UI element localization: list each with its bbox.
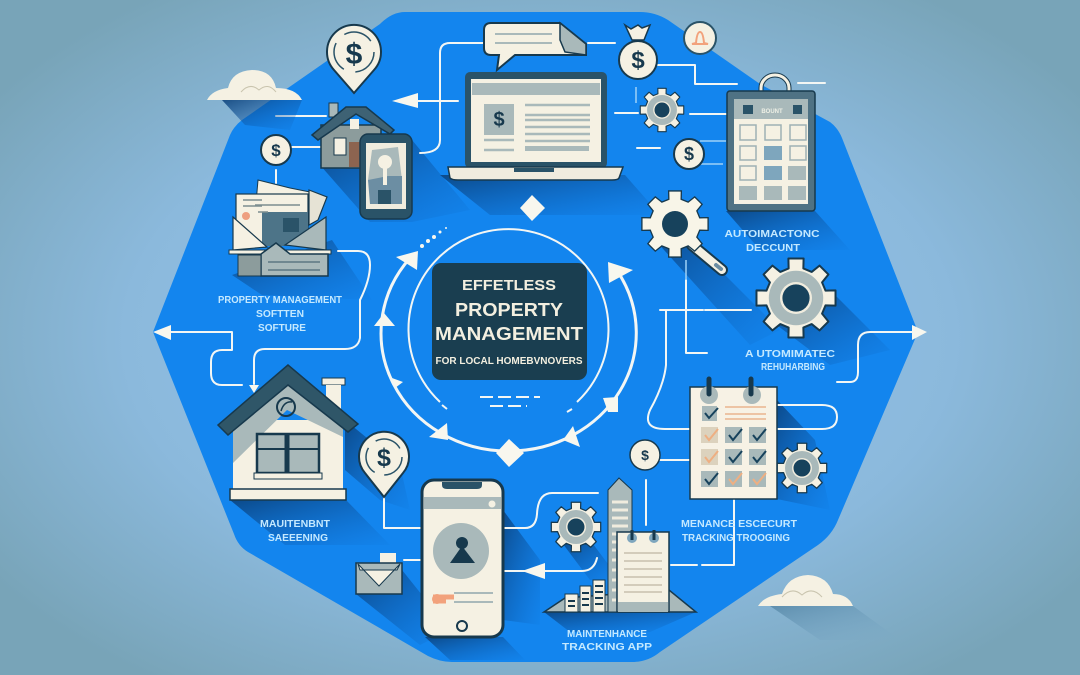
label: automatic rehubaring	[745, 349, 835, 373]
diagram: central cycle	[374, 195, 636, 467]
label: maintenance tracking app: MAINTENHANCE	[567, 629, 647, 640]
label: maintenance screening	[260, 519, 330, 544]
title box	[432, 263, 587, 380]
icon: small dollar coin right: $	[684, 144, 694, 164]
icon: phone app	[422, 480, 503, 637]
icon: small envelope	[356, 553, 402, 594]
title text: FOR LOCAL HOMEBVNOVERS	[436, 355, 582, 367]
title text: MANAGEMENT	[435, 324, 583, 344]
label: property management software	[218, 295, 342, 334]
icon: cloud top left	[207, 70, 302, 130]
dashes	[480, 397, 540, 406]
label: property management software: SOFTTEN	[256, 309, 304, 320]
icon: location pin bottom: $	[377, 444, 391, 472]
drop shadows	[230, 140, 890, 660]
icon: small dollar coin bottom: $	[641, 447, 649, 463]
icon: location pin bottom	[359, 432, 409, 497]
icon: small dollar coin left	[261, 135, 291, 165]
outer arc with arrows	[381, 258, 636, 451]
label: tracking	[681, 519, 797, 544]
icon: big gear	[756, 258, 836, 338]
icon: gear with wrench	[642, 191, 722, 270]
arrowheads	[153, 93, 927, 579]
icon: laptop	[448, 72, 623, 180]
label: automatic rehubaring: A UTOMIMATEC	[745, 349, 835, 360]
icon: gear small top	[640, 88, 684, 132]
icon: gear bottom	[551, 502, 601, 552]
icon: small dollar coin left: $	[271, 141, 281, 160]
label: maintenance screening: MAUITENBNT	[260, 519, 330, 530]
icon: speech bubble	[484, 23, 586, 70]
diamond	[520, 195, 545, 221]
label: automatic discount: DECCUNT	[746, 243, 800, 254]
label: automatic rehubaring: REHUHARBING	[761, 362, 825, 373]
connector lines	[170, 43, 914, 571]
label: automatic discount	[724, 229, 820, 254]
label: tracking: TRACKING TROOGING	[682, 533, 790, 544]
title text	[435, 277, 583, 367]
icon: cloud bottom right	[758, 575, 900, 640]
panel: blue octagon	[153, 12, 918, 662]
icon: orange coin	[684, 22, 716, 54]
label: tracking: MENANCE ESCECURT	[681, 519, 797, 530]
icon: big house	[218, 365, 358, 500]
icon: gear beside checklist	[777, 443, 827, 493]
icon: top location pin with dollar: $	[346, 38, 363, 71]
title text: PROPERTY	[455, 300, 563, 320]
icon: money bag: $	[631, 47, 645, 74]
icon: checklist calendar	[690, 379, 777, 499]
icon: calculator tablet	[727, 75, 815, 211]
cycle end ticks	[442, 405, 572, 412]
label: maintenance screening: SAEEENING	[268, 533, 328, 544]
label: automatic discount: AUTOIMACTONC	[724, 229, 820, 240]
inner circle	[408, 229, 608, 402]
label: property management software: SOFTURE	[258, 323, 306, 334]
icon: documents envelope	[229, 180, 331, 276]
cycle arrowheads	[374, 251, 633, 467]
label: property management software: PROPERTY MANAGEMENT	[218, 295, 342, 306]
icon: buildings with notepad	[544, 478, 696, 612]
icon: calculator tablet: BOUNT	[761, 109, 783, 115]
label: maintenance tracking app: TRACKING APP	[562, 642, 652, 653]
icon: money bag	[619, 25, 657, 79]
icon: small dollar coin right	[674, 139, 704, 169]
dots	[420, 227, 447, 248]
faint connector lines	[636, 87, 726, 280]
icon: small dollar coin bottom	[630, 440, 660, 470]
icon: laptop: $	[493, 109, 505, 131]
label: maintenance tracking app	[562, 629, 652, 653]
icon: small phone	[360, 134, 412, 219]
title text: EFFETLESS	[462, 277, 556, 294]
icon: top location pin with dollar	[327, 25, 381, 93]
icon: small house	[312, 103, 394, 168]
